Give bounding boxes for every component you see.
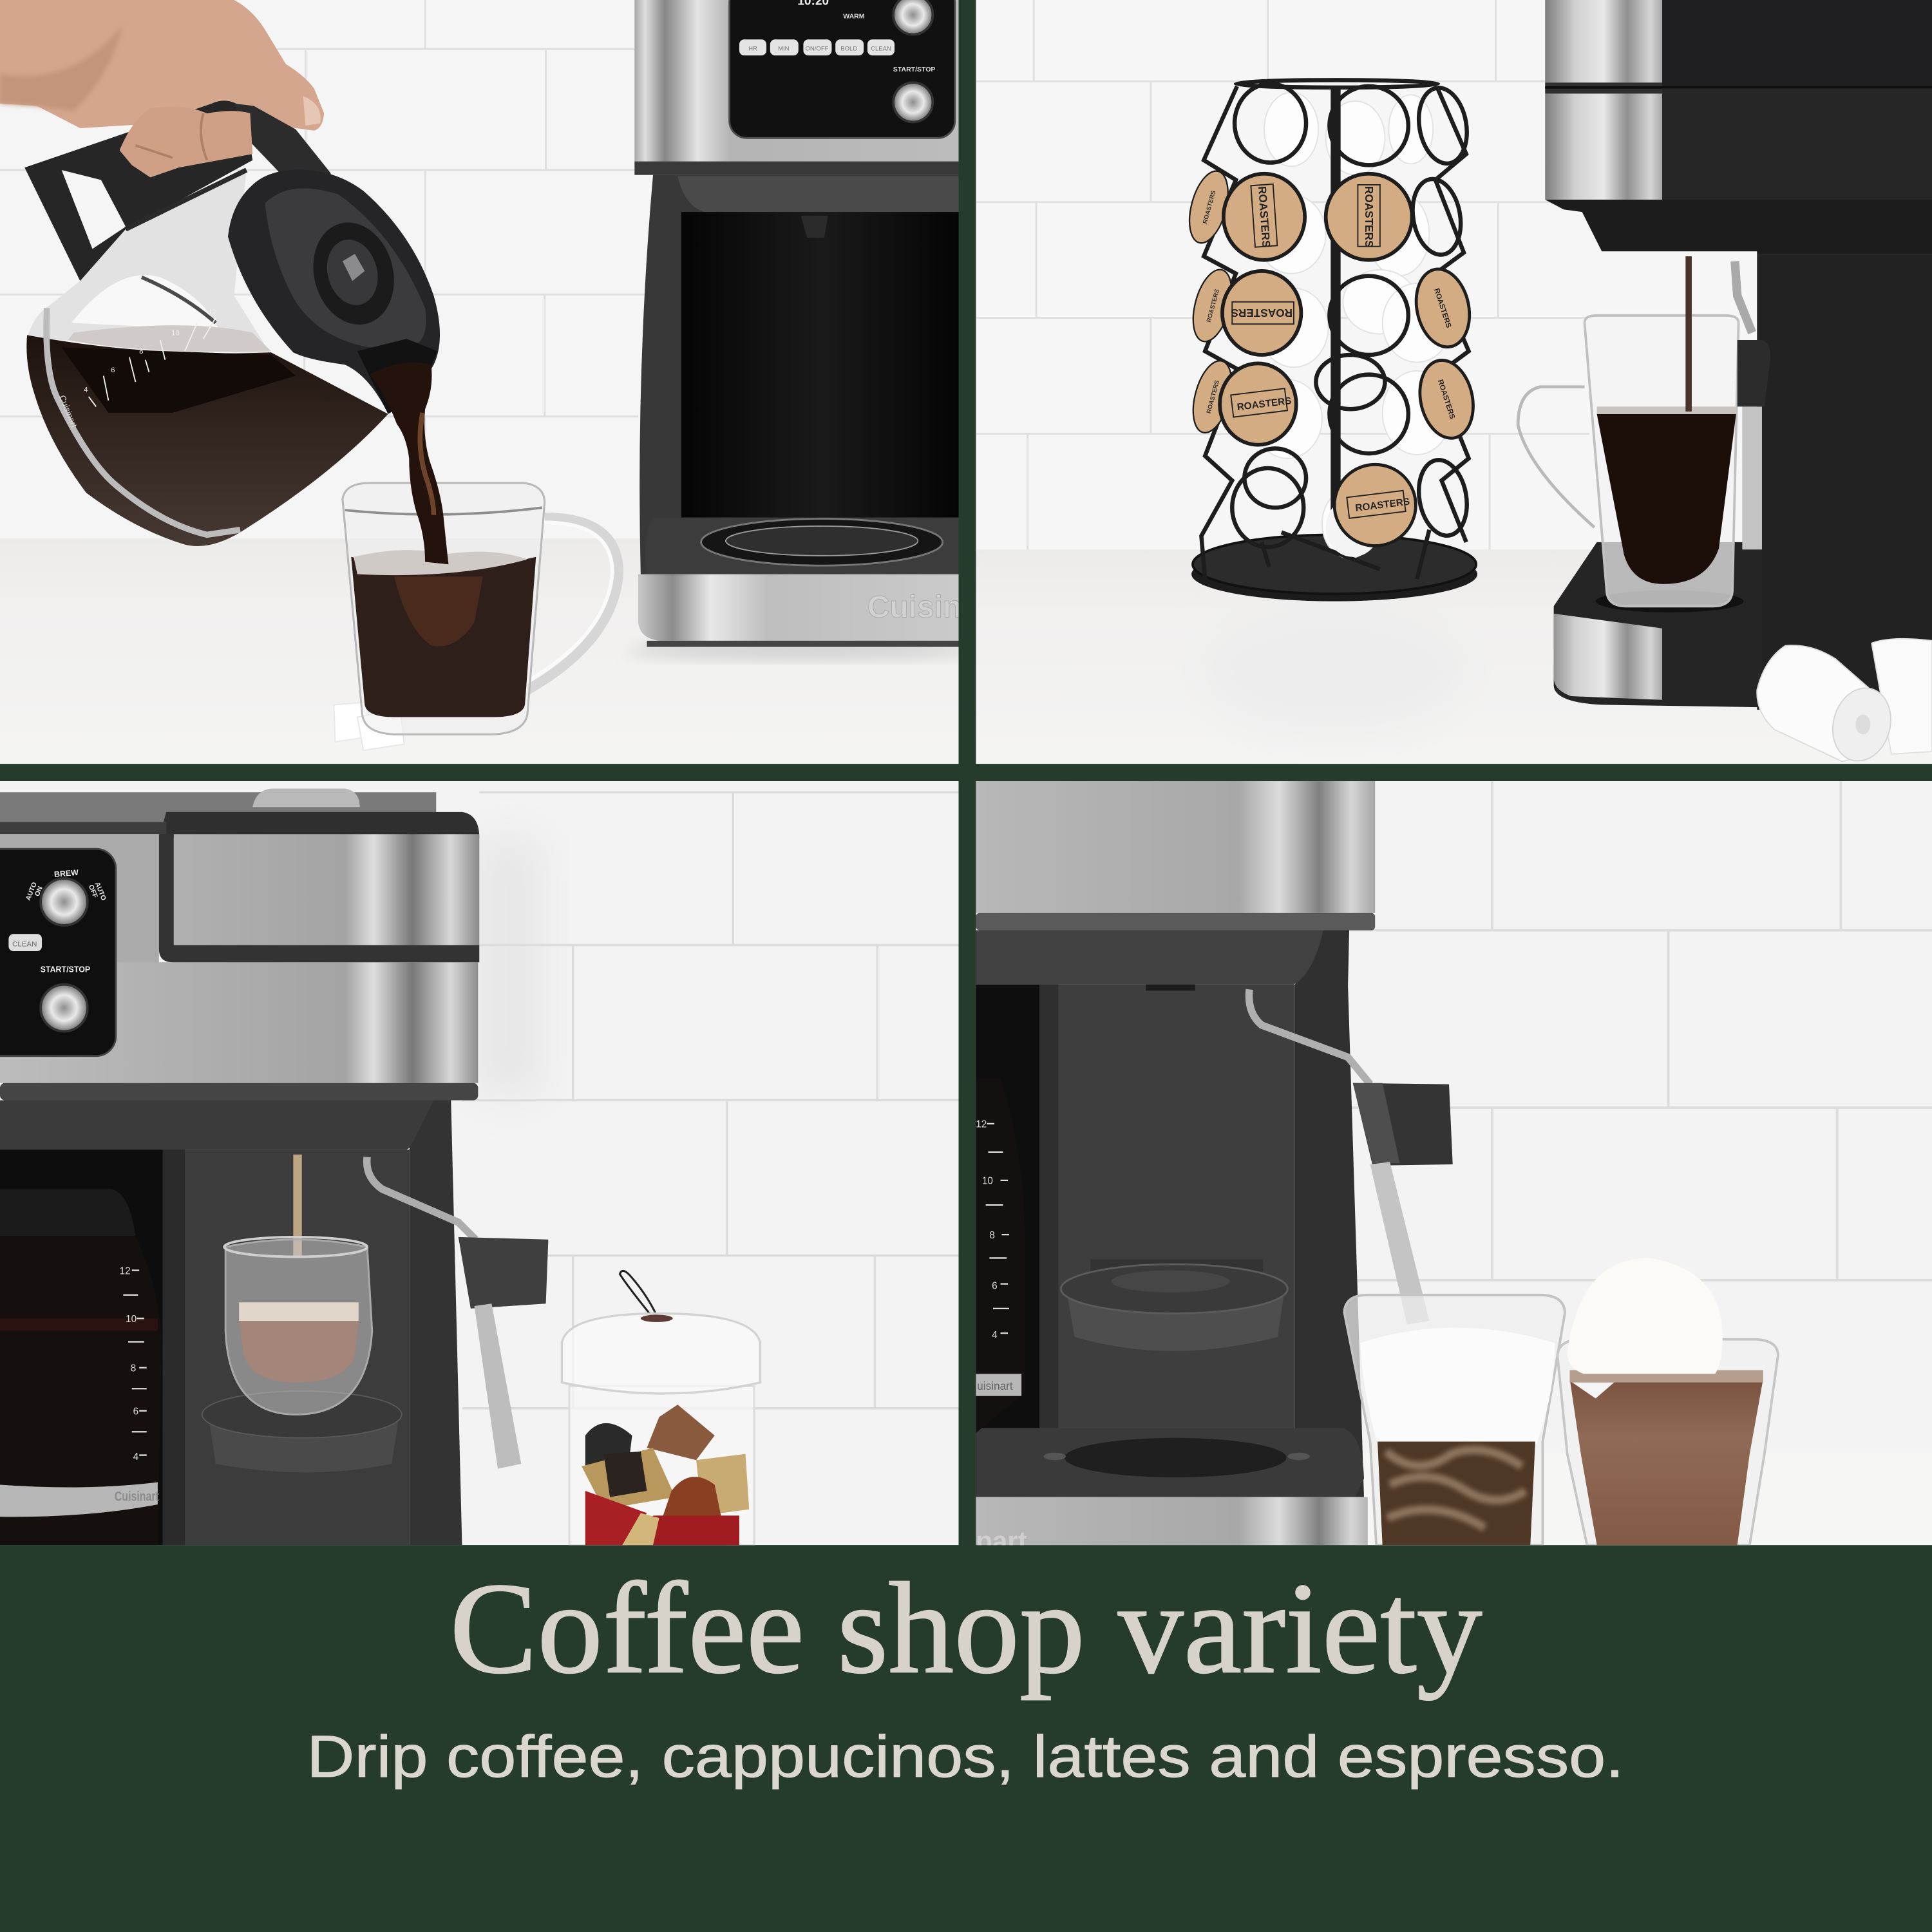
carafe scale — [84, 308, 216, 406]
control panel: ON/OFF — [805, 45, 829, 52]
carafe scale: 8 — [131, 1363, 136, 1374]
brand mark: Cuisinart — [115, 1489, 159, 1504]
tiled wall — [0, 0, 959, 542]
ice cream scoop — [1567, 1258, 1723, 1374]
carafe scale: 12 — [976, 1119, 987, 1130]
coffee machine body — [976, 781, 1375, 1556]
pod: bottom center: ROASTERS — [1355, 497, 1410, 514]
pod: right row three — [1409, 264, 1476, 352]
pod: left row two — [1224, 174, 1305, 260]
tall glass with coffee — [1518, 256, 1739, 606]
coffee machine body — [0, 788, 479, 1545]
marble counter — [0, 538, 959, 764]
pod carousel rack — [1182, 80, 1480, 601]
lid — [228, 170, 440, 414]
pod: right row three: ROASTERS — [1432, 287, 1452, 329]
drip coffee machine — [629, 0, 1001, 659]
sugar cubes — [334, 703, 404, 750]
loose white pods — [1757, 639, 1932, 768]
pod: far left middle — [1186, 265, 1238, 346]
milk foam — [1360, 1328, 1555, 1444]
brand mark: Cuisinart — [867, 591, 1001, 625]
panel: milk frothing drinks — [976, 781, 1932, 1556]
coffee pour stream — [370, 363, 448, 564]
espresso machine — [1545, 0, 1932, 710]
control panel: MIN — [778, 45, 790, 52]
glass carafe: uisinart — [977, 1379, 1013, 1392]
capsules — [582, 1405, 749, 1545]
control panel — [0, 849, 116, 1056]
panel: espresso cup — [0, 781, 958, 1546]
pod: far left middle: ROASTERS — [1206, 289, 1221, 323]
glass mug — [343, 483, 618, 734]
pod: far left top — [1182, 167, 1235, 247]
pod: left row two: ROASTERS — [1256, 185, 1273, 248]
pod: far left top: ROASTERS — [1202, 190, 1217, 225]
title: Coffee shop variety — [450, 1555, 1482, 1700]
control panel: START/STOP — [41, 965, 90, 974]
hand holding carafe — [0, 0, 324, 131]
subtitle: Drip coffee, cappucinos, lattes and espresso. — [307, 1724, 1624, 1790]
carafe scale: 4 — [133, 1452, 139, 1463]
tiled wall — [976, 0, 1932, 552]
marble counter — [976, 549, 1932, 764]
glass carafe — [976, 1078, 1025, 1433]
steam wand — [1249, 989, 1453, 1325]
glass body — [27, 170, 271, 355]
control panel: WARM — [843, 13, 865, 21]
pod: right row four — [1413, 355, 1480, 443]
steam wand — [367, 1157, 548, 1469]
pod: left row three: ROASTERS — [1231, 307, 1293, 319]
white pods behind — [1253, 92, 1452, 558]
carafe scale — [120, 1265, 147, 1463]
pod: far left lower — [1186, 357, 1238, 437]
carafe scale: 12 — [208, 308, 216, 316]
pod: left row four: ROASTERS — [1236, 395, 1292, 413]
carafe scale — [976, 1119, 1009, 1341]
tiled wall — [0, 781, 959, 1545]
control panel: BOLD — [840, 45, 857, 52]
latte glass — [1344, 1295, 1565, 1545]
panel: pod carousel and single serve — [976, 0, 1932, 764]
steam wand — [1735, 261, 1770, 549]
coffee in mug — [351, 557, 536, 717]
control panel: START/STOP — [893, 66, 935, 73]
tiled wall — [976, 781, 1932, 1545]
coffee stream — [1685, 256, 1692, 412]
fingers — [120, 107, 252, 178]
control panel: HR — [748, 45, 757, 52]
carafe scale: 8 — [989, 1230, 995, 1241]
carafe: Cuisinart — [57, 394, 79, 429]
brand mark: part — [976, 1526, 1027, 1556]
carafe — [24, 100, 440, 546]
carafe scale: 6 — [133, 1406, 138, 1417]
carafe scale: 10 — [171, 329, 180, 337]
control panel — [730, 0, 955, 138]
control panel: AUTO — [24, 881, 39, 902]
glass jar of capsules — [562, 1271, 760, 1545]
carafe scale: 10 — [126, 1314, 137, 1325]
carafe scale: 12 — [120, 1265, 131, 1276]
drip tray — [1061, 1259, 1287, 1351]
latte swirl — [1378, 1442, 1535, 1545]
iced mocha glass — [1557, 1258, 1778, 1545]
coffee — [1597, 414, 1736, 584]
espresso glass — [224, 1237, 372, 1414]
control panel: OFF — [87, 884, 99, 900]
pod: right row four: ROASTERS — [1436, 379, 1456, 421]
control panel: ON — [33, 886, 44, 898]
carafe scale: 4 — [992, 1330, 998, 1341]
carafe scale: 6 — [111, 366, 115, 374]
drip tray — [202, 1391, 402, 1472]
carafe handle — [24, 100, 252, 281]
control panel: AUTO — [93, 881, 108, 902]
pod: left row four — [1220, 363, 1296, 445]
wire frame — [1201, 80, 1473, 579]
pod: far left lower: ROASTERS — [1206, 379, 1221, 414]
jar lid string — [620, 1271, 658, 1321]
control panel: CLEAN — [871, 45, 891, 52]
pod: center row two: ROASTERS — [1363, 186, 1376, 248]
silver band — [46, 308, 240, 535]
carafe scale: 4 — [84, 386, 88, 393]
control panel: BREW — [53, 868, 79, 879]
carafe scale: 10 — [982, 1176, 993, 1187]
carafe scale: 6 — [992, 1280, 998, 1291]
glass carafe — [0, 1189, 162, 1545]
espresso stream — [293, 1155, 302, 1256]
panel: drip coffee pour — [0, 0, 1001, 764]
pod: center row two — [1326, 174, 1412, 260]
pod: bottom center — [1326, 464, 1416, 557]
control panel: CLEAN — [12, 940, 37, 948]
coffee in carafe — [26, 335, 388, 546]
carafe scale: 8 — [139, 348, 144, 355]
pod: left row three — [1222, 271, 1301, 355]
rack base — [1191, 535, 1477, 601]
